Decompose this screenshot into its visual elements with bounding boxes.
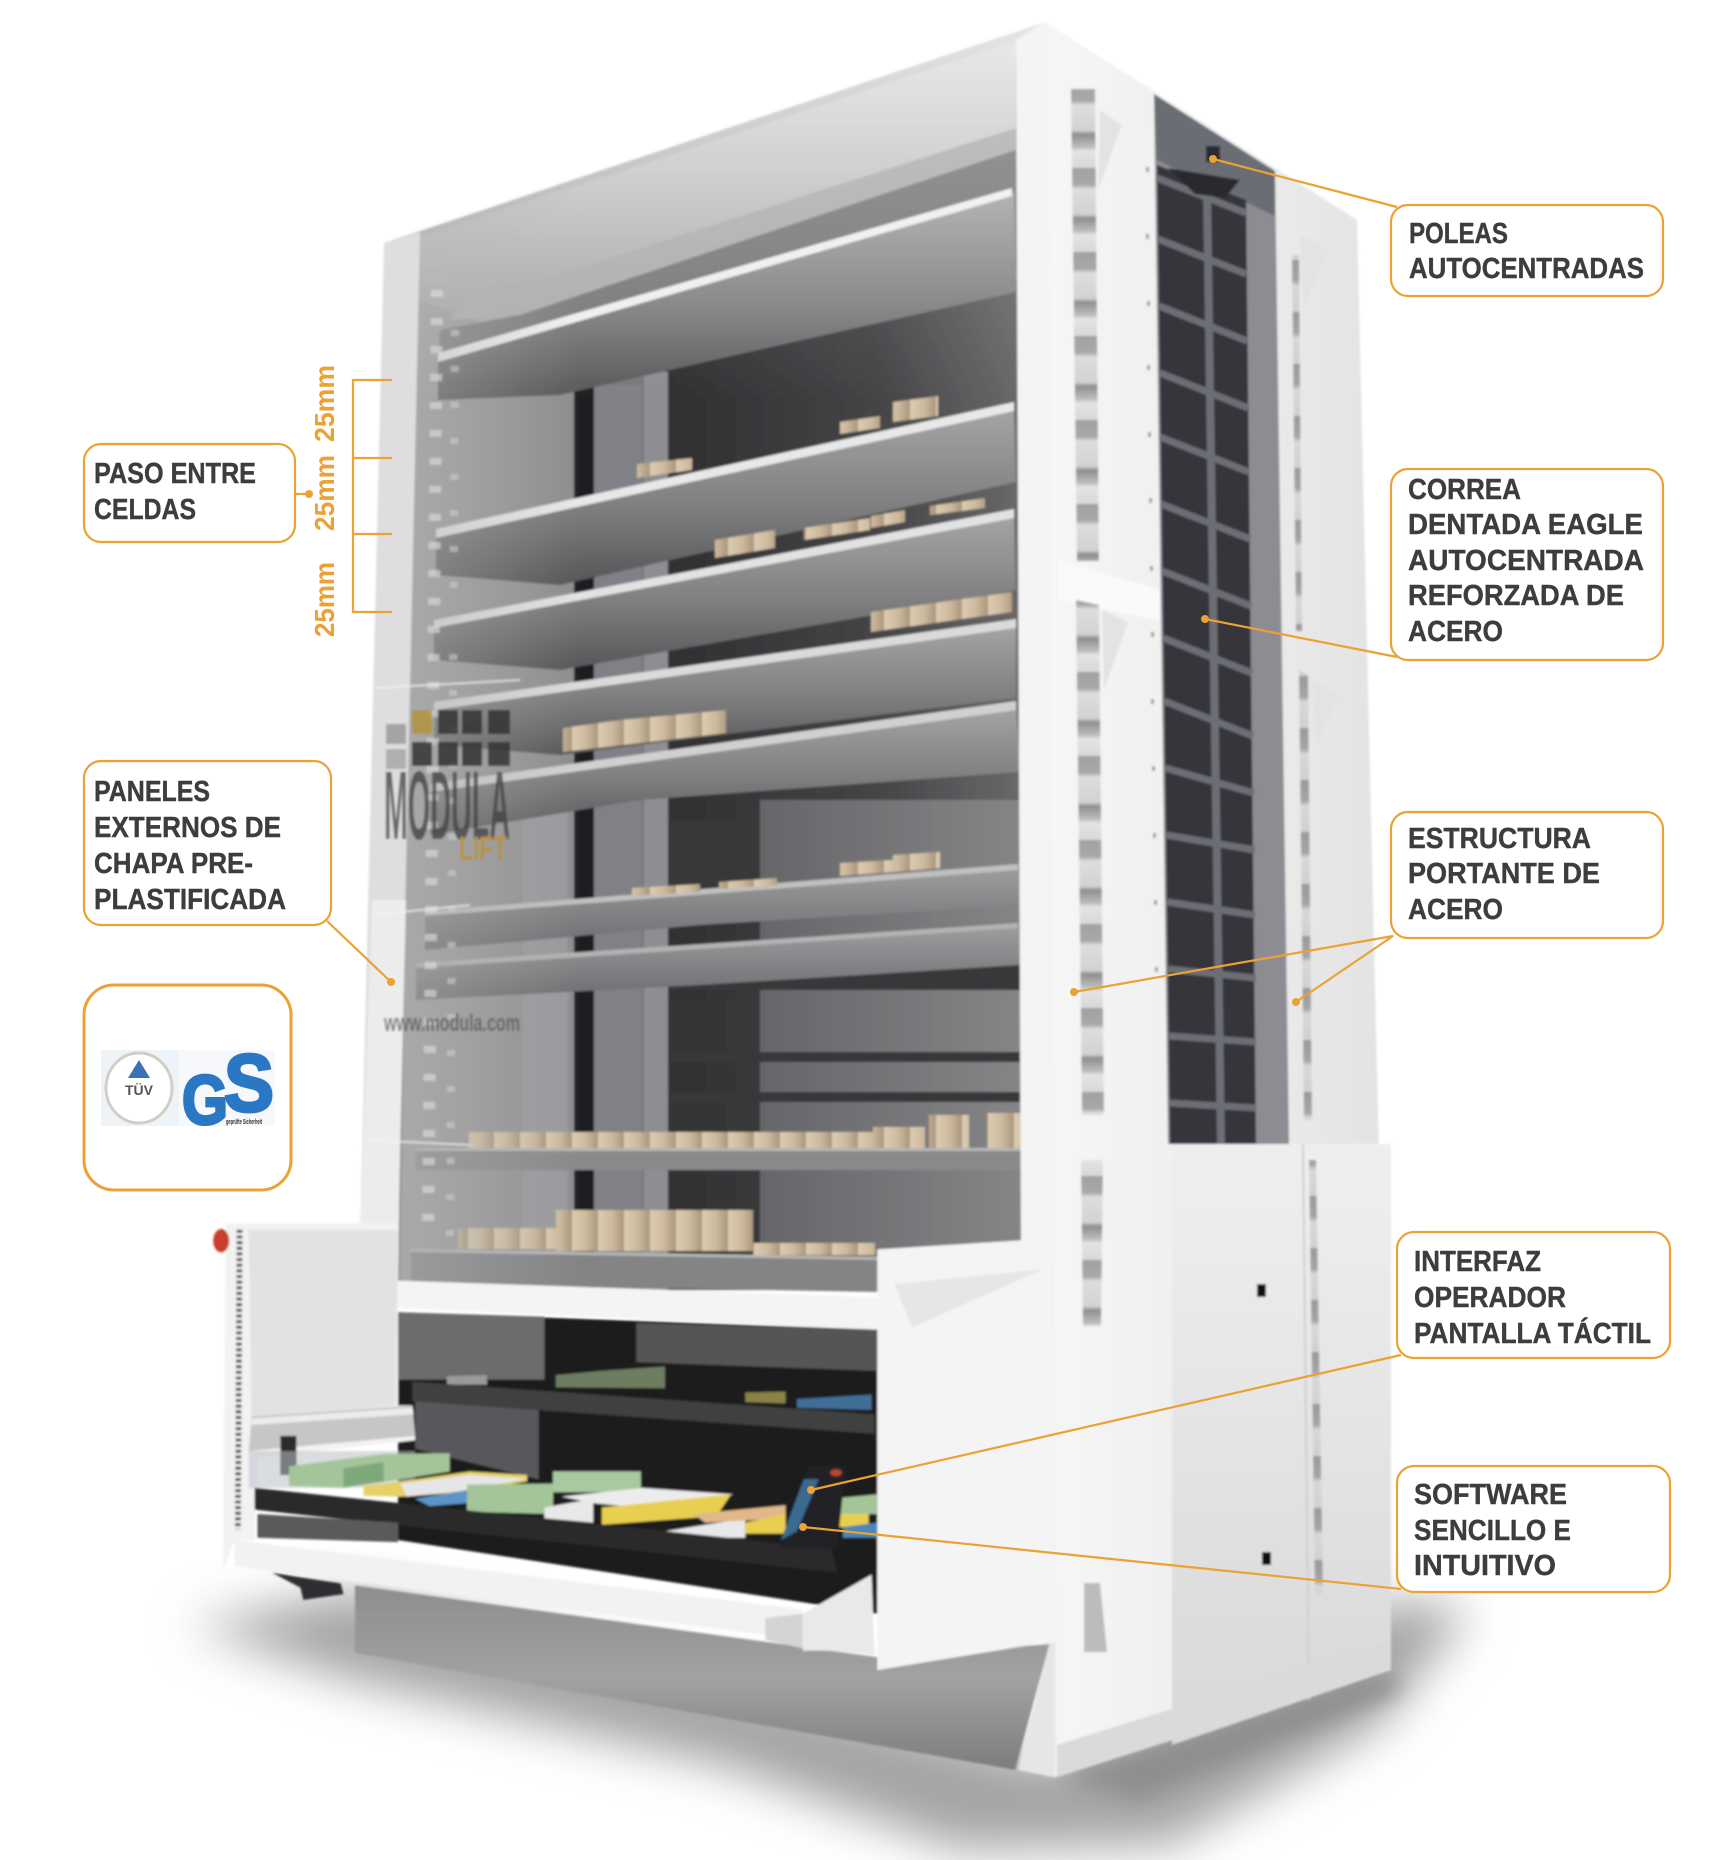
shelf 7 <box>416 923 1021 1000</box>
callout: paso entre celdas <box>84 444 313 542</box>
logo LIFT: LIFT <box>459 830 507 868</box>
left door <box>223 1223 415 1572</box>
callout: correa dentada: REFORZADA DE <box>1408 580 1624 612</box>
GS logo: geprüfte Sicherheit <box>226 1119 262 1126</box>
GS logo <box>179 1038 275 1139</box>
shelves <box>411 188 1021 1292</box>
cross-panel seams <box>365 680 520 1145</box>
right front column <box>877 1239 1050 1670</box>
callout: software: INTUITIVO <box>1414 1550 1556 1582</box>
pulley <box>1206 146 1220 162</box>
shelf 3 <box>434 509 1016 670</box>
lower panel seam <box>1302 1144 1310 1700</box>
callout: correa dentada: ACERO <box>1408 616 1503 648</box>
panel fixing dots <box>1146 167 1158 972</box>
top fade overlay <box>412 40 1020 400</box>
contact shadow <box>1057 1670 1400 1800</box>
callout: correa dentada <box>1201 469 1663 660</box>
shelf 5 <box>430 701 1020 835</box>
base plinth <box>355 1586 1050 1770</box>
machine: vertical lift module: MODULA <box>384 751 510 860</box>
callout: poleas autocentradas: POLEAS <box>1409 218 1508 250</box>
callout: paso entre celdas: CELDAS <box>94 494 196 526</box>
shelf 8 <box>416 1148 1021 1170</box>
MODULA logo on glass <box>383 710 520 1037</box>
logo grid <box>386 710 510 769</box>
TUV logo <box>101 1050 179 1126</box>
plinth band <box>1057 1640 1391 1777</box>
callout: software: SOFTWARE <box>1414 1479 1567 1511</box>
certification box <box>84 985 291 1190</box>
callout: estructura portante <box>1070 812 1663 1006</box>
tray goods <box>289 1453 877 1538</box>
callout: estructura portante: PORTANTE DE <box>1408 858 1600 890</box>
panel wedges <box>1098 110 1340 745</box>
GS logo: G <box>182 1061 228 1139</box>
left translucent pillar <box>360 232 420 1240</box>
rear dark zone <box>666 280 1021 1290</box>
corner fillet <box>1018 1643 1055 1778</box>
callout: interfaz operador: PANTALLA TÁCTIL <box>1414 1316 1651 1350</box>
callout: poleas autocentradas <box>1209 155 1663 296</box>
ceiling beam <box>450 128 1016 320</box>
callout: interfaz operador <box>807 1232 1670 1494</box>
callout: correa dentada: AUTOCENTRADA <box>1408 545 1644 577</box>
tray front <box>255 1488 837 1572</box>
TUV logo: TÜV <box>125 1082 154 1098</box>
bay interior <box>398 1312 877 1614</box>
levelling foot <box>272 1572 344 1600</box>
drawer sill <box>234 1540 803 1640</box>
callout: estructura portante: ACERO <box>1408 894 1503 926</box>
lift column <box>523 372 668 1290</box>
open front: storage interior <box>384 22 1045 1292</box>
lower bay: door, drawer, tray <box>213 1223 1055 1778</box>
callout: paso entre celdas: PASO ENTRE <box>94 458 256 490</box>
callout: software <box>799 1466 1670 1592</box>
dimension 25mm top: 25mm <box>309 365 340 442</box>
shelf 9 <box>411 1249 880 1292</box>
beam underside <box>438 150 1016 360</box>
lift shaft with ladder <box>1154 94 1289 1144</box>
shelf 4 <box>434 619 1016 755</box>
floor shadow <box>190 1590 1470 1850</box>
callout: poleas autocentradas: AUTOCENTRADAS <box>1409 253 1644 285</box>
ceiling <box>384 22 1045 330</box>
left rack zone <box>400 200 580 1290</box>
ladder rails <box>1157 178 1256 1144</box>
callout: paneles externos: PANELES <box>94 776 210 808</box>
callout: paneles externos: EXTERNOS DE <box>94 812 281 844</box>
rack notches <box>428 290 455 1240</box>
right front column <box>1016 26 1052 1250</box>
pillar cross brace <box>1058 560 1160 620</box>
left pillar fade to bottom <box>360 900 406 1240</box>
callout: interfaz operador: OPERADOR <box>1414 1282 1566 1314</box>
dimension bracket <box>309 365 392 637</box>
callout: correa dentada: CORREA <box>1408 474 1521 506</box>
callout: estructura portante: ESTRUCTURA <box>1408 823 1591 855</box>
GS logo: S <box>224 1038 274 1129</box>
shelf 1 <box>438 188 1016 400</box>
callout: paneles externos <box>84 761 395 986</box>
callout: interfaz operador: INTERFAZ <box>1414 1246 1541 1278</box>
emergency stop button <box>213 1229 229 1252</box>
side panel <box>1016 22 1391 1777</box>
shelf 2 <box>436 402 1016 585</box>
thin rear shelves <box>670 820 1020 1146</box>
callout: correa dentada: DENTADA EAGLE <box>1408 509 1643 541</box>
dimension 25mm bottom: 25mm <box>309 562 340 637</box>
drawer underside <box>257 1514 398 1542</box>
left fade overlay <box>398 185 580 1290</box>
hinge bracket <box>765 1614 803 1648</box>
machine: vertical lift module <box>213 22 1391 1778</box>
touch screen console <box>780 1466 846 1549</box>
column wedge <box>895 1269 1044 1327</box>
callout: paneles externos: CHAPA PRE- <box>94 848 253 880</box>
shelf 6 <box>425 864 1021 950</box>
front pillar <box>1016 22 1058 1777</box>
stored material boxes <box>458 396 1021 1255</box>
website: www.modula.com <box>383 1010 520 1037</box>
callout: software: SENCILLO E <box>1414 1515 1571 1547</box>
lower side panel <box>1172 1144 1391 1745</box>
side slots <box>1071 89 1323 1652</box>
dimension 25mm middle: 25mm <box>309 455 340 531</box>
white lintel <box>398 1281 877 1330</box>
upper dim tray with goods <box>412 1366 874 1434</box>
callout: paneles externos: PLASTIFICADA <box>94 884 286 916</box>
